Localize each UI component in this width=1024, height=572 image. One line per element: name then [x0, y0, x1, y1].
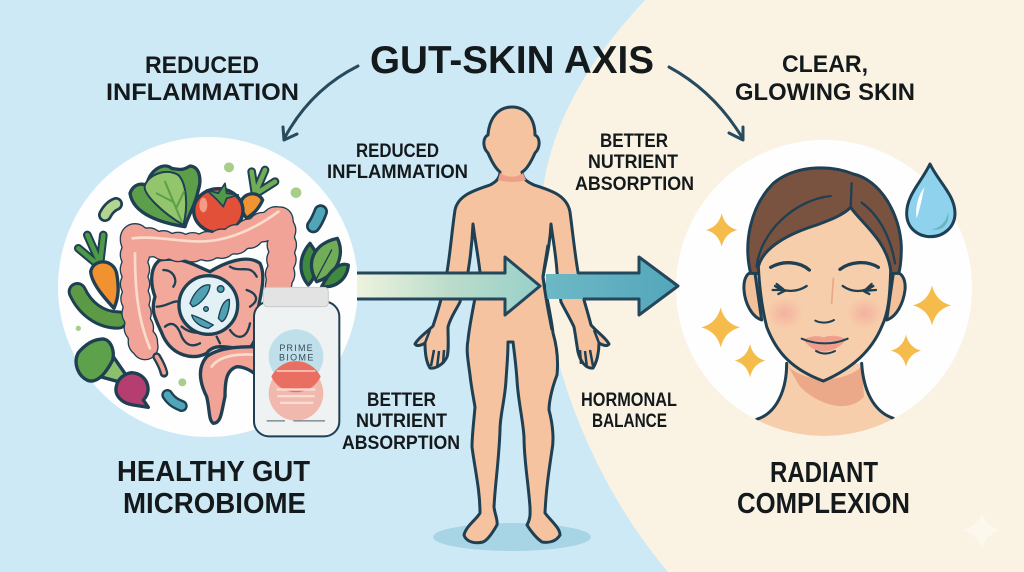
closed eyes — [773, 284, 876, 294]
large intestine — [133, 212, 282, 373]
label: better nutrient absorption upper: NUTRIENT — [588, 152, 678, 173]
heading: healthy gut microbiome: HEALTHY GUT — [117, 456, 310, 488]
title: GUT-SKIN AXIS — [370, 39, 654, 82]
bottle brand text — [279, 343, 313, 362]
label: better nutrient absorption upper: BETTER — [600, 131, 668, 152]
icon: spinach — [301, 238, 348, 287]
heading: healthy gut microbiome — [117, 456, 310, 520]
icon: water drop — [907, 164, 955, 237]
face — [758, 207, 891, 381]
label: hormonal balance — [581, 390, 677, 432]
bottle brand text: BIOME — [279, 352, 313, 362]
ears — [744, 273, 905, 320]
face illustration — [701, 164, 955, 443]
neck — [757, 363, 893, 443]
bottle brand text: PRIME — [279, 343, 313, 353]
label: better nutrient absorption upper — [575, 131, 694, 195]
icon: lettuce — [130, 166, 200, 227]
heading: radiant complexion: RADIANT — [770, 457, 878, 489]
small intestine — [152, 259, 263, 356]
microscope view with bacteria — [179, 276, 238, 334]
human body figure — [415, 107, 609, 551]
label: clear glowing skin — [735, 51, 915, 106]
waist line over arrows — [543, 245, 552, 330]
icon: broccoli — [76, 339, 126, 382]
label: better nutrient absorption lower: ABSORPTION — [342, 433, 460, 454]
curved arrow to gut — [283, 66, 358, 140]
label: reduced inflammation center: REDUCED — [356, 141, 439, 162]
heading: healthy gut microbiome: MICROBIOME — [123, 488, 306, 520]
eyebrows — [771, 263, 878, 270]
label: better nutrient absorption lower: NUTRIENT — [356, 411, 447, 432]
icon: carrot left — [78, 235, 118, 308]
label: better nutrient absorption lower — [342, 390, 460, 454]
heading: radiant complexion: COMPLEXION — [737, 488, 910, 520]
skin illustration panel — [676, 140, 972, 436]
label: reduced inflammation top left — [106, 52, 299, 106]
icon: bacteria pills — [76, 162, 321, 406]
hair back — [748, 168, 901, 273]
label: reduced inflammation top left: INFLAMMATION — [106, 79, 299, 106]
gut illustration — [76, 162, 348, 436]
label: clear glowing skin: GLOWING SKIN — [735, 79, 915, 106]
cheeks — [767, 297, 883, 329]
nose — [815, 278, 834, 323]
label: hormonal balance: HORMONAL — [581, 390, 677, 411]
watermark sparkle — [964, 513, 1000, 548]
label: hormonal balance: BALANCE — [592, 411, 667, 432]
hair strands — [757, 183, 895, 267]
flow arrow: body to skin — [546, 257, 678, 315]
label: better nutrient absorption lower: BETTER — [367, 390, 436, 411]
label: clear glowing skin: CLEAR, — [782, 51, 868, 78]
heading: radiant complexion — [737, 457, 910, 520]
flow arrow: gut to body — [357, 257, 540, 315]
descending colon and rectum — [200, 347, 263, 423]
icon: carrot top — [241, 170, 275, 218]
supplement bottle — [254, 287, 339, 436]
sparkles — [701, 213, 951, 377]
label: better nutrient absorption upper: ABSORPTION — [575, 174, 694, 195]
label: reduced inflammation center: INFLAMMATION — [327, 162, 468, 183]
background: cream skin side — [540, 0, 1024, 572]
label: reduced inflammation center — [327, 141, 468, 183]
icon: tomato — [194, 183, 243, 233]
label: reduced inflammation top left: REDUCED — [145, 52, 259, 79]
gut illustration panel — [58, 137, 358, 437]
icon: cucumber — [77, 292, 118, 320]
curved arrow to skin — [669, 67, 743, 140]
icon: beet — [116, 373, 148, 407]
lips — [802, 336, 848, 353]
